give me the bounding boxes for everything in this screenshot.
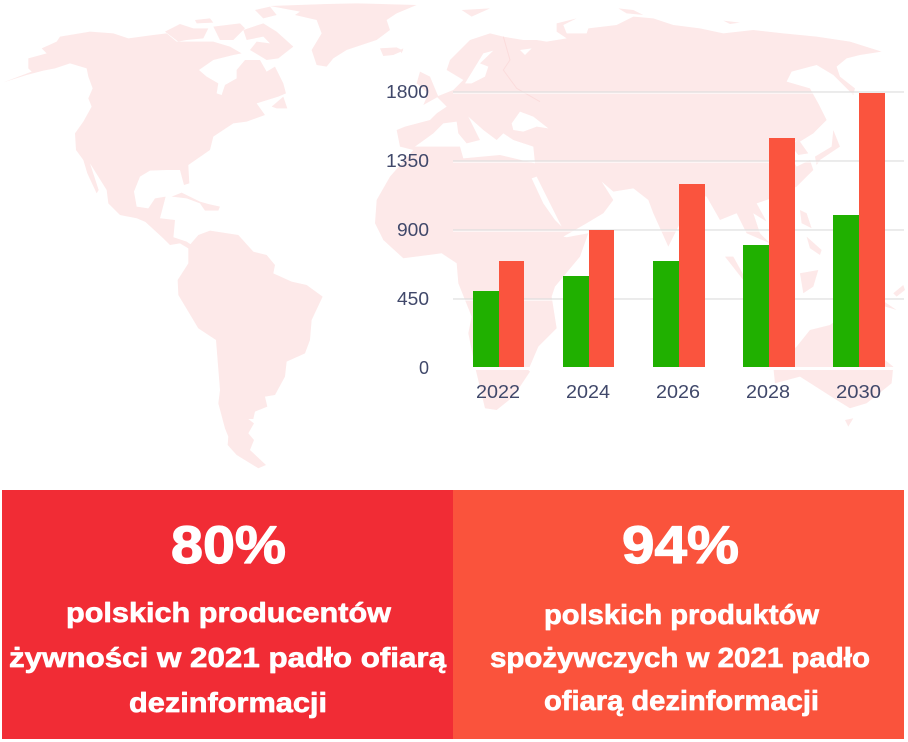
bars 2030 [833, 93, 885, 367]
stat: 80%: 80% [171, 516, 286, 575]
y axis labels: 0 [419, 358, 429, 378]
bar chart [386, 82, 904, 402]
map: eastern border line [503, 37, 540, 102]
stat: 94%: 94% [622, 516, 739, 575]
text: producers caption [9, 597, 446, 718]
world map background [3, 3, 905, 468]
map: Europe, Asia, Africa and Oceania [375, 8, 905, 427]
y axis labels: 900 [397, 220, 429, 240]
bars 2024 [563, 230, 614, 367]
x axis labels: 2028 [746, 382, 790, 402]
map: North America and Greenland [3, 3, 417, 238]
text: products caption: ofiarą dezinformacji [544, 685, 819, 716]
y axis labels: 1800 [386, 82, 429, 102]
bars 2022 [473, 261, 524, 367]
map: seas and coast cut-outs [415, 48, 562, 227]
chart gridlines [453, 92, 904, 370]
text: products caption [490, 599, 870, 716]
x axis labels: 2022 [476, 382, 520, 402]
text: producers caption: dezinformacji [129, 687, 327, 718]
x axis labels: 2024 [566, 382, 610, 402]
bars 2026 [653, 184, 705, 367]
bars 2028 [743, 138, 795, 367]
text: products caption: polskich produktów [544, 599, 819, 630]
x axis labels [476, 382, 881, 402]
text: producers caption: żywności w 2021 padło ofiarą [9, 642, 446, 673]
y axis labels: 1350 [386, 151, 429, 171]
text: products caption: spożywczych w 2021 padło [490, 642, 870, 673]
y axis labels [386, 82, 429, 378]
x axis labels: 2026 [656, 382, 700, 402]
y axis labels: 450 [397, 289, 429, 309]
x axis labels: 2030 [836, 382, 881, 402]
text: producers caption: polskich producentów [66, 597, 391, 628]
panel: 80% of producers [2, 490, 453, 739]
panel: 94% of products [453, 490, 904, 739]
map: South America [143, 220, 323, 468]
